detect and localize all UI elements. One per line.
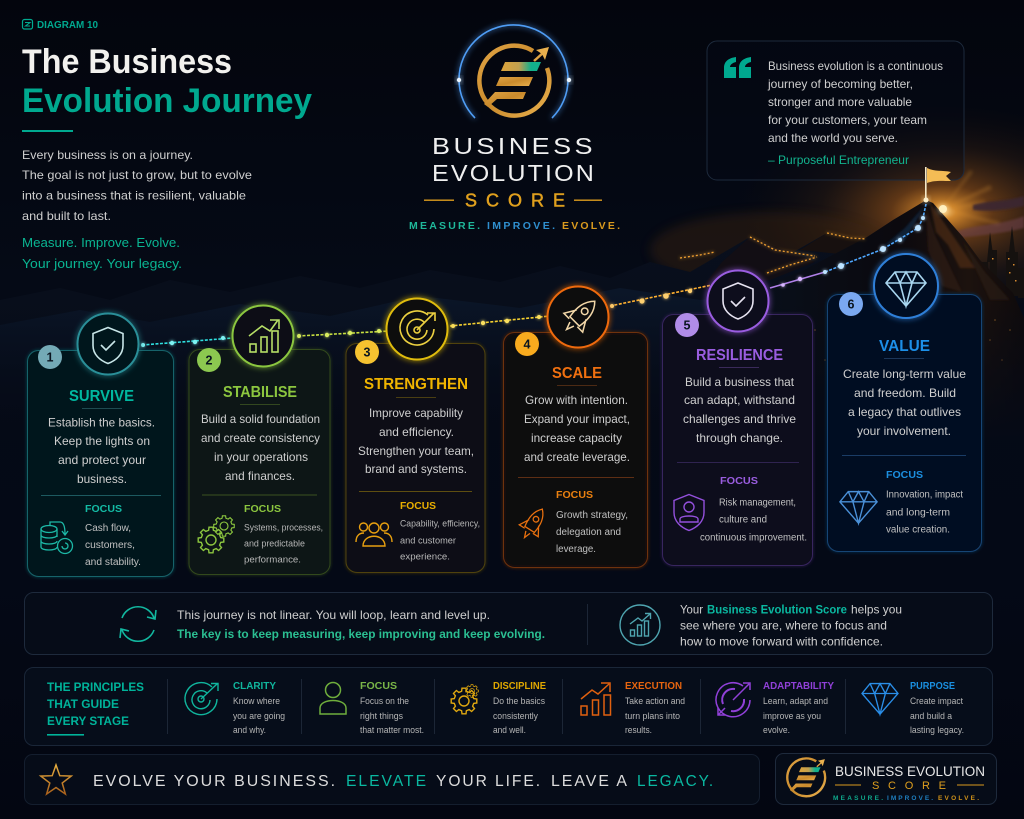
description	[518, 385, 634, 478]
title	[22, 43, 312, 132]
tagline text: YOUR LIFE.	[436, 773, 542, 790]
logo wordmark: EVOLUTION	[432, 160, 596, 186]
text: score: how to move forward with confidence.	[680, 634, 883, 648]
focus: FOCUS	[886, 469, 923, 481]
quote text: journey of becoming better,	[767, 77, 913, 91]
principle: discipline: DISCIPLINE	[493, 681, 546, 692]
step number 4	[515, 332, 539, 356]
description: brand and systems.	[365, 462, 467, 476]
step number 2: 2	[206, 354, 213, 368]
icon: shield person	[674, 494, 704, 530]
icon: loop arrows	[120, 607, 156, 641]
intro text: Your journey. Your legacy.	[22, 257, 182, 271]
description: in your operations	[214, 450, 308, 464]
focus: Cash flow,	[85, 523, 131, 534]
icon: small rocket	[515, 503, 552, 544]
principle: execution: results.	[625, 725, 652, 735]
principle: adaptability: improve as you	[763, 711, 821, 721]
text: not linear: The key is to keep measuring, keep improving and keep evolving.	[177, 627, 545, 641]
principle: clarity: Know where	[233, 696, 280, 706]
principle: discipline: and well.	[493, 725, 526, 735]
principle: focus: Focus on the	[360, 696, 409, 706]
text: not linear	[177, 608, 545, 641]
heading: survive: SURVIVE	[69, 388, 134, 405]
focus: FOCUS	[244, 503, 281, 515]
focus: performance.	[244, 554, 301, 564]
icon: rocket	[548, 286, 608, 348]
focus: customers,	[85, 540, 135, 551]
principle: focus: FOCUS	[360, 681, 397, 692]
summit flag and sun	[924, 167, 951, 213]
description	[842, 358, 966, 456]
panel: journey message banner	[24, 592, 992, 654]
description: Create long-term value	[843, 367, 966, 381]
logo wordmark	[409, 133, 620, 232]
step number 3	[355, 340, 379, 364]
focus	[400, 500, 480, 562]
description: Expand your impact,	[524, 412, 630, 426]
text: score: see where you are, where to focus and	[680, 618, 887, 632]
description: your involvement.	[857, 424, 951, 438]
mountain landscape scene	[0, 102, 1024, 440]
tagline text: ELEVATE	[346, 773, 428, 790]
principle: adaptability: Learn, adapt and	[763, 696, 828, 706]
principle: adaptability: ADAPTABILITY	[763, 681, 834, 692]
footer wordmark: BUSINESS EVOLUTION	[835, 764, 985, 779]
focus: continuous improvement.	[700, 532, 807, 544]
step number 5	[675, 313, 699, 337]
description: and freedom. Build	[854, 386, 956, 400]
focus: FOCUS	[720, 475, 758, 487]
principle: clarity: you are going	[233, 711, 285, 721]
step number 4: 4	[524, 338, 531, 352]
focus	[85, 503, 141, 568]
description: and finances.	[225, 469, 295, 483]
description: Grow with intention.	[525, 393, 628, 407]
tagline text	[93, 773, 715, 790]
quote text: and the world you serve.	[768, 131, 898, 145]
focus: Risk management,	[719, 498, 796, 508]
panel: stage 6 value	[828, 254, 982, 552]
quote text	[767, 59, 943, 167]
principle: focus: right things	[360, 711, 404, 721]
focus: FOCUS	[85, 503, 122, 515]
focus: Capability, efficiency,	[400, 518, 480, 528]
principle: purpose: lasting legacy.	[910, 725, 964, 735]
description: Build a solid foundation	[201, 412, 320, 426]
description	[358, 397, 474, 492]
heading: stabilise: STABILISE	[223, 384, 297, 401]
quote text: – Purposeful Entrepreneur	[768, 153, 909, 167]
title: The Business	[22, 43, 232, 81]
panel: principles	[24, 668, 992, 746]
principle: clarity: CLARITY	[233, 681, 276, 692]
focus: Systems, processes,	[244, 522, 323, 532]
intro text: and built to last.	[22, 209, 111, 223]
quote text: Business evolution is a continuous	[768, 59, 943, 73]
icon: logo emblem	[457, 25, 571, 118]
heading: resilience: RESILIENCE	[696, 347, 783, 364]
principles heading	[47, 680, 144, 736]
logo wordmark: BUSINESS	[432, 133, 596, 159]
footer wordmark: EVOLVE.	[938, 795, 979, 802]
title: Evolution Journey	[22, 82, 312, 120]
quote text: for your customers, your team	[768, 113, 927, 127]
panel: stage 1 survive	[28, 314, 174, 576]
principle: discipline: Do the basics	[493, 696, 546, 706]
text: score: helps you	[851, 602, 902, 616]
step number 6: 6	[848, 298, 855, 312]
text: score	[680, 602, 902, 648]
intro text	[22, 148, 252, 271]
icon: small diamond	[840, 492, 877, 523]
focus: and predictable	[244, 538, 305, 548]
step number 3: 3	[364, 346, 371, 360]
footer wordmark: IMPROVE.	[887, 795, 933, 802]
principle: clarity: and why.	[233, 725, 266, 735]
description	[677, 367, 799, 463]
footer wordmark: SCORE	[872, 780, 946, 792]
tagline text: EVOLVE YOUR BUSINESS.	[93, 773, 337, 790]
description: Build a business that	[685, 375, 795, 389]
principle: purpose	[862, 681, 964, 735]
logo wordmark: EVOLVE.	[562, 220, 620, 232]
icon: star	[41, 765, 71, 794]
heading: value: VALUE	[879, 338, 930, 355]
footer wordmark	[833, 764, 985, 802]
description: through change.	[696, 431, 783, 445]
focus: and stability.	[85, 557, 141, 568]
logo wordmark: MEASURE.	[409, 220, 480, 232]
step number 2	[197, 348, 221, 372]
focus: and long-term	[886, 508, 950, 518]
icon: shield	[78, 314, 138, 374]
panel: quote	[707, 41, 964, 180]
focus: Growth strategy,	[556, 510, 628, 521]
diagram tag: DIAGRAM 10	[37, 19, 98, 31]
focus	[556, 489, 628, 555]
description: Keep the lights on	[54, 434, 150, 448]
description: Improve capability	[369, 406, 463, 420]
logo wordmark: SCORE	[465, 190, 565, 210]
icon: growth chart	[232, 306, 294, 366]
principles heading: EVERY STAGE	[47, 714, 129, 728]
principle: purpose: PURPOSE	[910, 681, 955, 692]
principles heading: THE PRINCIPLES	[47, 680, 144, 694]
tagline text: LEGACY.	[637, 773, 715, 790]
icon: quote marks	[724, 57, 751, 78]
principle: execution	[581, 681, 685, 735]
panel: tagline banner	[24, 754, 760, 804]
principle: adaptability: evolve.	[763, 725, 790, 735]
principle: execution: Take action and	[625, 696, 685, 706]
step number 1	[38, 345, 62, 369]
step number 1: 1	[47, 350, 54, 364]
focus: value creation.	[886, 524, 950, 536]
icon: gears	[198, 516, 234, 553]
central logo	[409, 25, 620, 232]
description: can adapt, withstand	[684, 393, 795, 407]
focus: FOCUS	[400, 500, 436, 512]
description: and create leverage.	[524, 450, 630, 464]
description: Establish the basics.	[48, 416, 155, 430]
description: and protect your	[58, 453, 146, 467]
principle: discipline: consistently	[493, 711, 539, 721]
intro text: The goal is not just to grow, but to evolve	[22, 168, 252, 182]
quote text: stronger and more valuable	[768, 95, 912, 109]
icon: coins and cycle	[41, 522, 72, 554]
focus: and customer	[400, 536, 456, 546]
focus	[244, 503, 323, 564]
description: and efficiency.	[379, 425, 454, 439]
intro text: Measure. Improve. Evolve.	[22, 236, 180, 250]
description	[41, 408, 161, 496]
panel: stage 5 resilience	[662, 270, 812, 566]
icon: footer emblem	[787, 758, 825, 796]
focus: culture and	[719, 514, 767, 526]
footer wordmark: MEASURE.	[833, 795, 883, 802]
principle: focus	[320, 681, 424, 735]
heading: strengthen: STRENGTHEN	[364, 376, 468, 393]
step number 5: 5	[684, 318, 691, 332]
focus: experience.	[400, 552, 450, 562]
description: a legacy that outlives	[848, 405, 961, 419]
focus: leverage.	[556, 544, 596, 555]
tagline text: LEAVE A	[551, 773, 629, 790]
step number 6	[839, 292, 863, 316]
glowing journey path	[141, 204, 926, 347]
panel: stage 2 stabilise	[189, 306, 330, 574]
heading: scale: SCALE	[552, 365, 602, 382]
icon: diamond	[874, 254, 938, 318]
focus: Innovation, impact	[886, 490, 963, 500]
focus	[700, 475, 807, 544]
panel: stage 4 scale	[504, 286, 648, 568]
focus: FOCUS	[556, 489, 593, 501]
description: challenges and thrive	[683, 412, 796, 426]
text: score: Business Evolution Score	[707, 602, 847, 616]
description: increase capacity	[531, 431, 622, 445]
principle: adaptability	[716, 681, 834, 735]
description	[201, 404, 320, 496]
principle: focus: that matter most.	[360, 725, 424, 735]
principle: purpose: Create impact	[910, 696, 964, 706]
principles heading: THAT GUIDE	[47, 697, 119, 711]
logo wordmark: IMPROVE.	[487, 220, 555, 232]
text: score: Your	[680, 602, 703, 616]
description: Strengthen your team,	[358, 444, 474, 458]
description: and create consistency	[201, 431, 320, 445]
icon: target	[386, 298, 448, 360]
principle: execution: turn plans into	[625, 711, 680, 721]
icon: team	[356, 523, 392, 546]
intro text: Every business is on a journey.	[22, 148, 193, 162]
principle: clarity	[185, 681, 285, 735]
focus: delegation and	[556, 527, 621, 538]
principle: purpose: and build a	[910, 711, 952, 721]
icon: shield check	[708, 270, 768, 332]
icon: score chart	[620, 605, 660, 645]
text: not linear: This journey is not linear. You will loop, learn and level up.	[177, 608, 490, 622]
focus	[886, 469, 963, 536]
panel: stage 3 strengthen	[346, 298, 485, 572]
principle: discipline	[451, 681, 546, 735]
principle: execution: EXECUTION	[625, 681, 682, 692]
description: business.	[77, 472, 127, 486]
intro text: into a business that is resilient, valuable	[22, 188, 246, 202]
panel: footer logo	[776, 754, 996, 804]
